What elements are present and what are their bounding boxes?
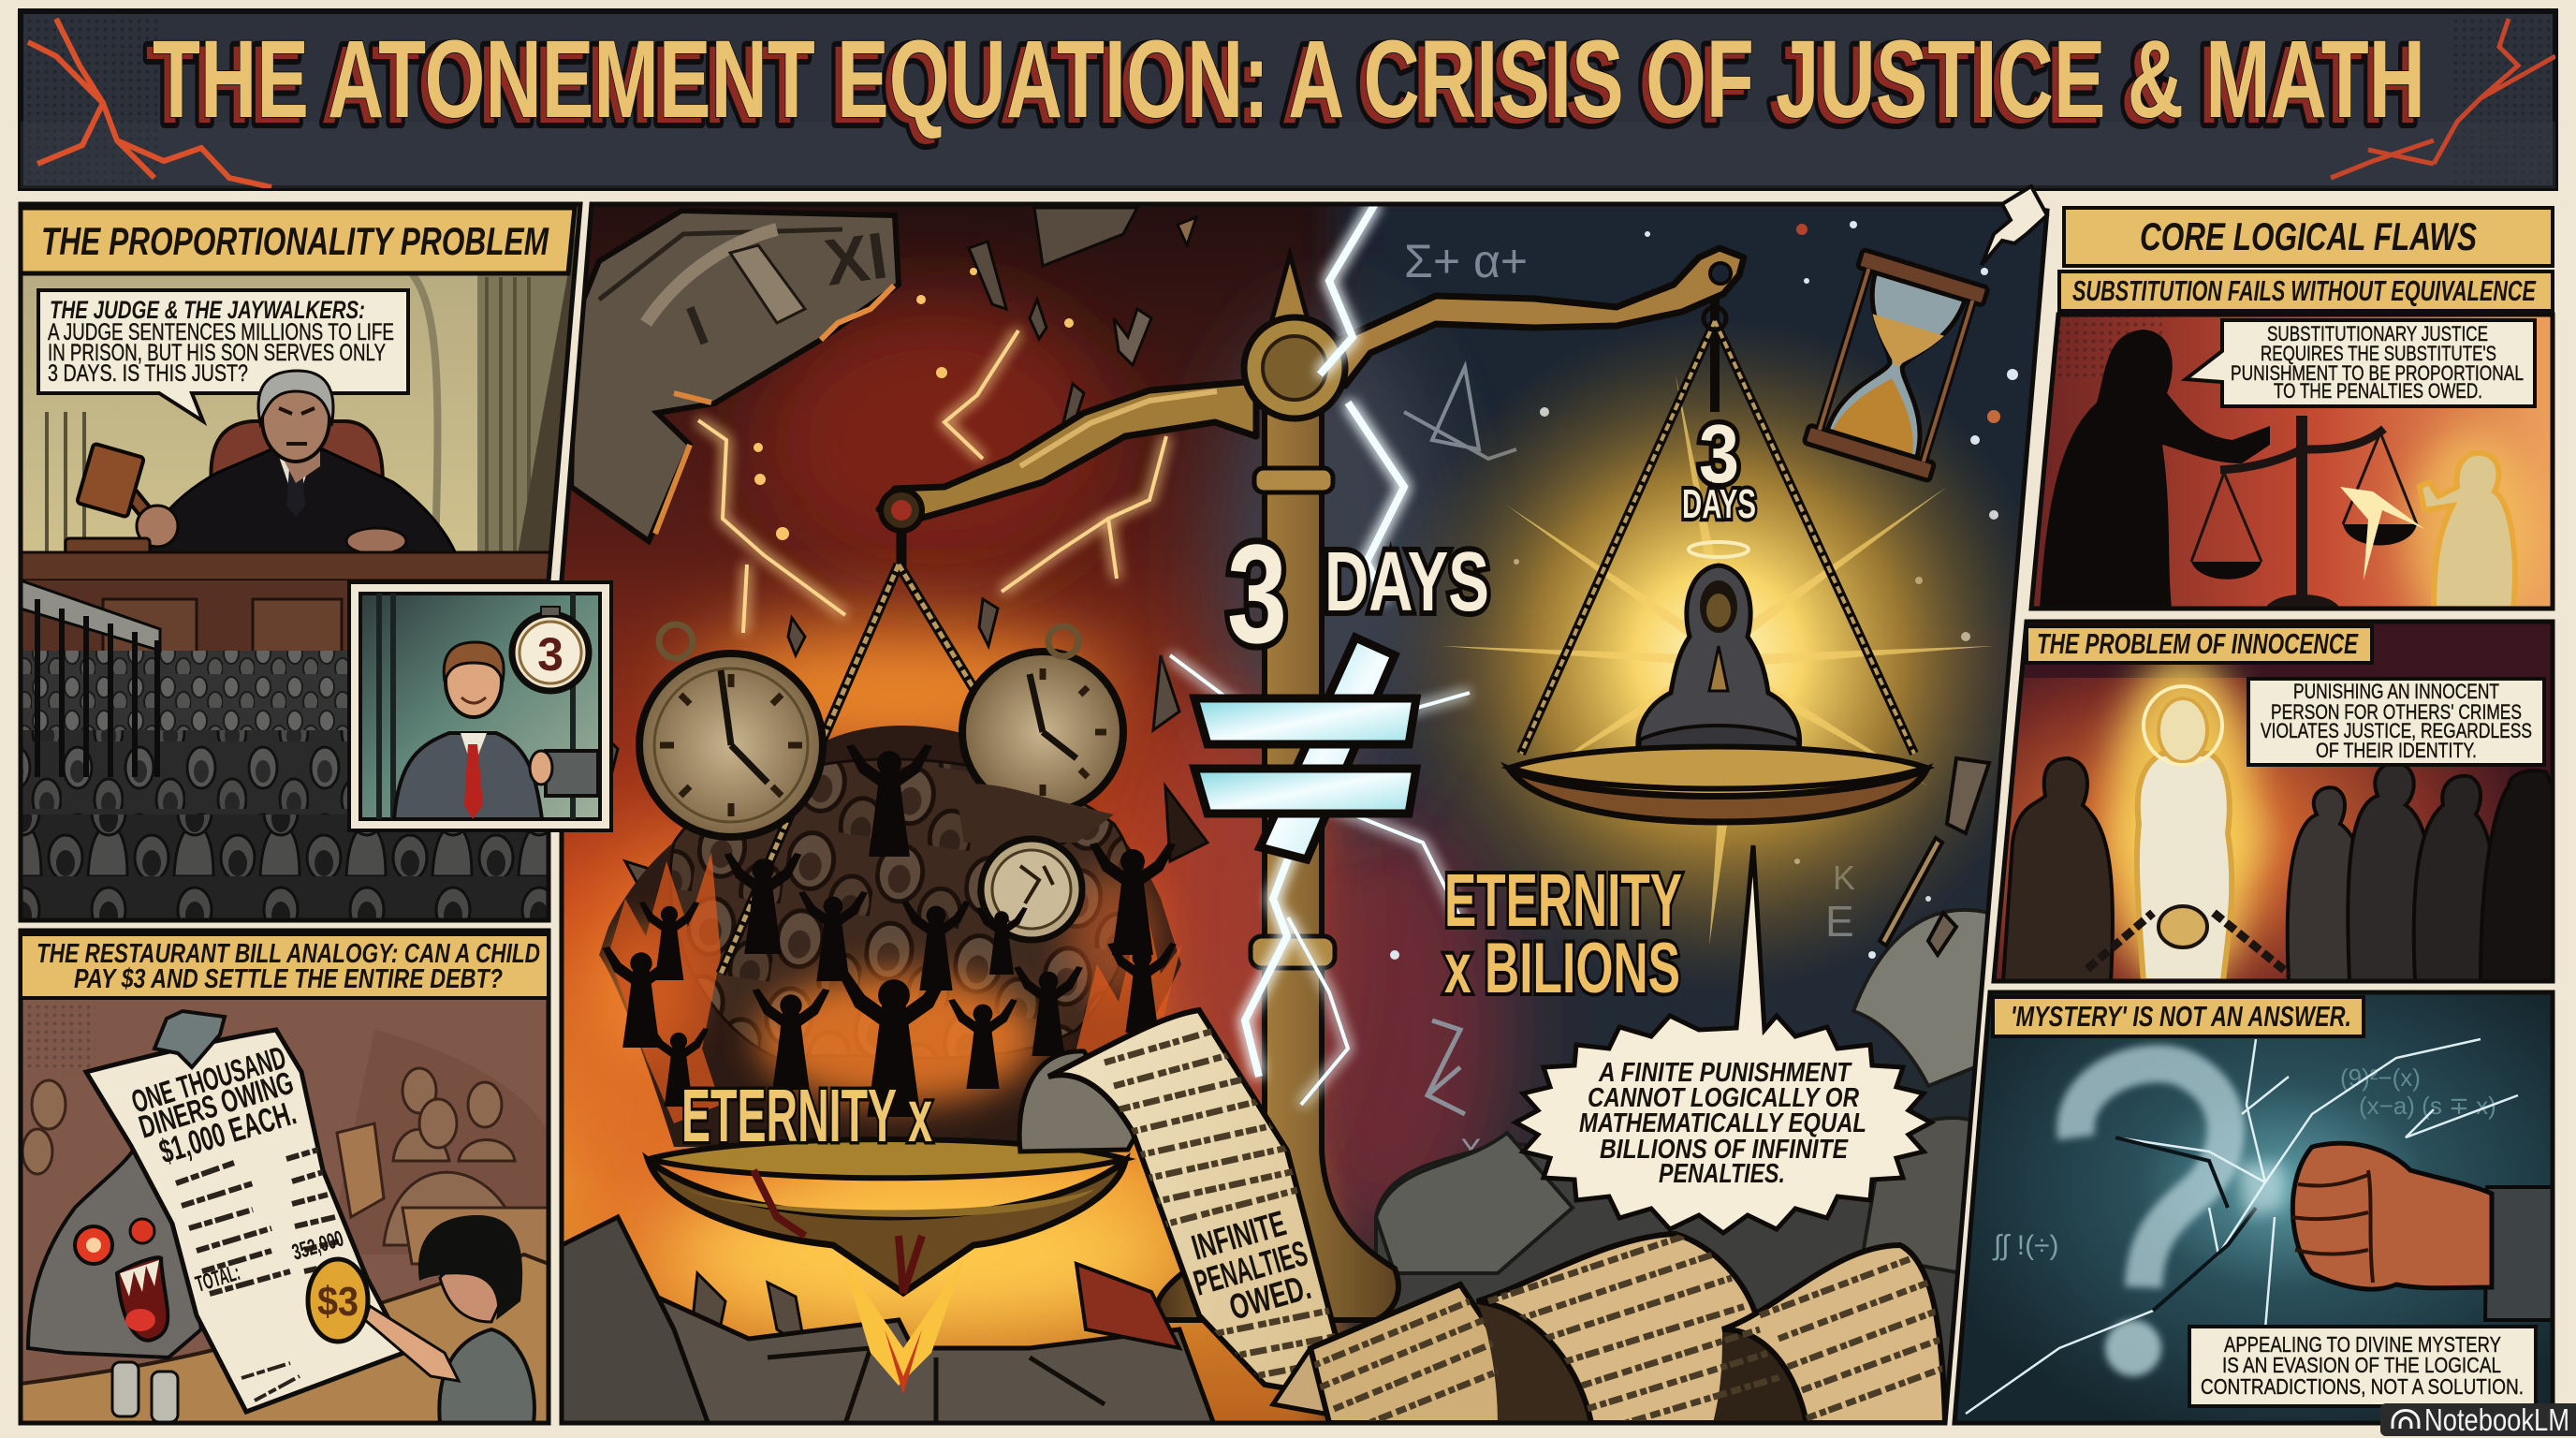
receipt: $1,000 EACH. bbox=[154, 1093, 300, 1171]
monster bbox=[28, 1137, 201, 1357]
hooded figure bbox=[1638, 542, 1802, 763]
$3 coin bbox=[308, 1259, 368, 1342]
judge's head bbox=[258, 371, 333, 483]
panel: substitution fails without equivalence bbox=[2027, 271, 2555, 637]
heading: restaurant bill analogy bbox=[21, 934, 549, 998]
text box: mystery: APPEALING TO DIVINE MYSTERY bbox=[2224, 1332, 2501, 1357]
heading: restaurant bill analogy: PAY $3 AND SETTLE THE ENTIRE DEBT? bbox=[74, 964, 503, 994]
speech bubble: judge and jaywalkers bbox=[38, 290, 408, 421]
innocent figure bbox=[2420, 453, 2515, 609]
scroll heading text: PENALTIES bbox=[1190, 1234, 1312, 1304]
heading: core logical flaws: CORE LOGICAL FLAWS bbox=[2140, 214, 2477, 258]
fiery left background bbox=[552, 202, 1382, 1429]
text box: innocence: OF THEIR IDENTITY. bbox=[2316, 739, 2477, 762]
bystanders left bbox=[2003, 758, 2113, 981]
shadow figure bbox=[2040, 330, 2270, 609]
stopwatch bbox=[512, 607, 589, 691]
melting clocks bbox=[639, 624, 1123, 940]
child bbox=[365, 1215, 534, 1423]
math scribbles: ∫∫ !(÷) bbox=[1992, 1230, 2059, 1261]
broken stone clock face bbox=[571, 211, 899, 541]
crowd of jaywalkers bbox=[21, 651, 549, 922]
starburst callout: CANNOT LOGICALLY OR bbox=[1588, 1083, 1859, 1113]
ETERNITY x label: ETERNITY x bbox=[681, 1074, 932, 1157]
right hanging chains bbox=[1521, 276, 1914, 754]
flames licking the pile bbox=[608, 852, 1181, 1142]
math scribbles: (x−a) (s ∓ x) bbox=[2359, 1092, 2496, 1120]
receipt bbox=[86, 1011, 406, 1412]
text box: innocence: PUNISHING AN INNOCENT bbox=[2293, 680, 2499, 703]
math scribbles: (9)²−(x) bbox=[2340, 1064, 2421, 1092]
speech tail spike bbox=[1982, 186, 2047, 265]
$3 coin: $3 bbox=[317, 1279, 359, 1325]
ETERNITY x BILIONS label bbox=[1444, 858, 1682, 1008]
scroll heading text bbox=[1188, 1204, 1315, 1328]
scroll: infinite penalties owed bbox=[1019, 1010, 1353, 1400]
speech box: substitution: SUBSTITUTIONARY JUSTICE bbox=[2267, 322, 2488, 345]
judge's robe bbox=[140, 449, 456, 554]
golden light burst bbox=[1382, 318, 2056, 992]
starburst callout bbox=[1515, 845, 1931, 1233]
debris bbox=[599, 208, 1208, 1348]
bystanders right bbox=[2288, 762, 2560, 981]
pile of damned figures on left pan bbox=[599, 726, 1181, 1147]
receipt: ONE THOUSAND bbox=[127, 1040, 290, 1121]
starburst callout: A FINITE PUNISHMENT bbox=[1598, 1058, 1852, 1088]
receipt: 352,000 bbox=[289, 1226, 346, 1266]
orange lightning bbox=[698, 330, 1166, 633]
speech box: substitution: TO THE PENALTIES OWED. bbox=[2274, 379, 2482, 403]
panel: the problem of innocence bbox=[1989, 622, 2560, 992]
starburst callout: MATHEMATICALLY EQUAL bbox=[1579, 1108, 1866, 1138]
cyan lightning bbox=[1170, 202, 1470, 1105]
heading: proportionality problem bbox=[21, 208, 575, 273]
heading: mystery: 'MYSTERY' IS NOT AN ANSWER. bbox=[2011, 1000, 2351, 1033]
panel: proportionality problem bbox=[21, 204, 582, 922]
right pan bbox=[1510, 747, 1926, 822]
math symbols: Σ+ α+ bbox=[1404, 235, 1528, 287]
math symbols: K bbox=[1833, 858, 1855, 897]
beam of the scale bbox=[879, 248, 1744, 531]
starburst callout: PENALTIES. bbox=[1659, 1159, 1785, 1189]
heading: proportionality problem: THE PROPORTIONALITY PROBLEM bbox=[41, 219, 549, 263]
broken stone clock face: XI bbox=[820, 218, 892, 300]
speech bubble: judge and jaywalkers: THE JUDGE & THE JAYWALKERS: bbox=[50, 296, 365, 324]
judge's chair bbox=[209, 419, 385, 477]
silhouettes with raised arms bbox=[603, 744, 1177, 1117]
big 3 DAYS label bbox=[1227, 515, 1489, 672]
text box: innocence bbox=[2248, 679, 2544, 765]
small 3 DAYS on right pan: 3 bbox=[1699, 407, 1739, 500]
courtroom bench bbox=[21, 552, 582, 580]
heading: core logical flaws bbox=[2064, 208, 2553, 266]
son figure bbox=[394, 642, 598, 819]
small scale bbox=[2191, 416, 2424, 609]
cracked ground with lava bbox=[558, 1217, 1217, 1432]
math symbols bbox=[1404, 235, 1855, 1168]
math scribbles bbox=[1992, 1064, 2496, 1261]
inset panel: son with three-day clock bbox=[349, 582, 611, 830]
panel: restaurant bill analogy bbox=[21, 931, 549, 1423]
speech box: substitution: REQUIRES THE SUBSTITUTE'S bbox=[2261, 342, 2496, 365]
heading: restaurant bill analogy: THE RESTAURANT BILL ANALOGY: CAN A CHILD bbox=[37, 939, 540, 969]
receipt: DINERS OWING bbox=[135, 1065, 298, 1146]
unrolled scrolls on ground bbox=[1273, 1234, 1947, 1428]
big 3 DAYS label: 3 bbox=[1227, 515, 1287, 672]
prison bars bbox=[21, 580, 160, 777]
panel: central scale illustration bbox=[552, 169, 2101, 1438]
heading: mystery bbox=[1993, 997, 2364, 1036]
gavel bbox=[66, 444, 178, 555]
speech bubble: judge and jaywalkers: 3 DAYS. IS THIS JUST? bbox=[48, 360, 248, 387]
text box: mystery bbox=[2189, 1327, 2536, 1406]
ETERNITY x BILIONS label: ETERNITY bbox=[1444, 858, 1682, 942]
scroll heading text: OWED. bbox=[1225, 1268, 1315, 1328]
diners bbox=[22, 1068, 515, 1245]
cracks bbox=[1966, 1039, 2518, 1414]
heading: problem of innocence bbox=[2027, 626, 2372, 663]
text box: mystery: IS AN EVASION OF THE LOGICAL bbox=[2222, 1353, 2501, 1377]
salt shakers bbox=[112, 1362, 178, 1422]
speech bubble: judge and jaywalkers: IN PRISON, BUT HIS SON SERVES ONLY bbox=[48, 340, 386, 366]
innocent prisoner bbox=[2087, 686, 2289, 981]
math symbols: E bbox=[1825, 897, 1854, 946]
small 3 DAYS on right pan: DAYS bbox=[1682, 481, 1756, 527]
central pillar of the scale bbox=[1157, 255, 1398, 1320]
glowing question mark bbox=[2075, 1064, 2226, 1376]
receipt: TOTAL: bbox=[193, 1260, 243, 1298]
title banner bbox=[21, 11, 2555, 188]
broken stone clock face: I bbox=[679, 294, 716, 358]
starry right background bbox=[1151, 169, 2101, 1438]
smoke clouds bbox=[1376, 910, 1989, 1432]
panel: mystery is not an answer bbox=[1952, 992, 2555, 1423]
scroll heading text: INFINITE bbox=[1188, 1204, 1291, 1269]
speech bubble: judge and jaywalkers: A JUDGE SENTENCES MILLIONS TO LIFE bbox=[48, 319, 394, 345]
heading: problem of innocence: THE PROBLEM OF INNOCENCE bbox=[2037, 627, 2359, 660]
big 3 DAYS label: DAYS bbox=[1325, 536, 1489, 629]
ETERNITY x BILIONS label: x BILIONS bbox=[1444, 929, 1680, 1008]
hourglass bbox=[1804, 249, 1988, 481]
not-equal sign bbox=[1194, 638, 1416, 859]
small 3 DAYS on right pan bbox=[1682, 407, 1756, 527]
left pan bbox=[649, 1139, 1125, 1293]
table top bbox=[21, 1255, 549, 1423]
starburst callout: BILLIONS OF INFINITE bbox=[1600, 1135, 1849, 1165]
math symbols: X bbox=[1460, 1133, 1482, 1168]
fist bbox=[2291, 1143, 2555, 1320]
chains to left pan bbox=[721, 515, 1067, 974]
stone shards right bbox=[1880, 758, 1989, 955]
stopwatch: 3 bbox=[537, 628, 564, 681]
speech box: substitution bbox=[2186, 320, 2535, 406]
